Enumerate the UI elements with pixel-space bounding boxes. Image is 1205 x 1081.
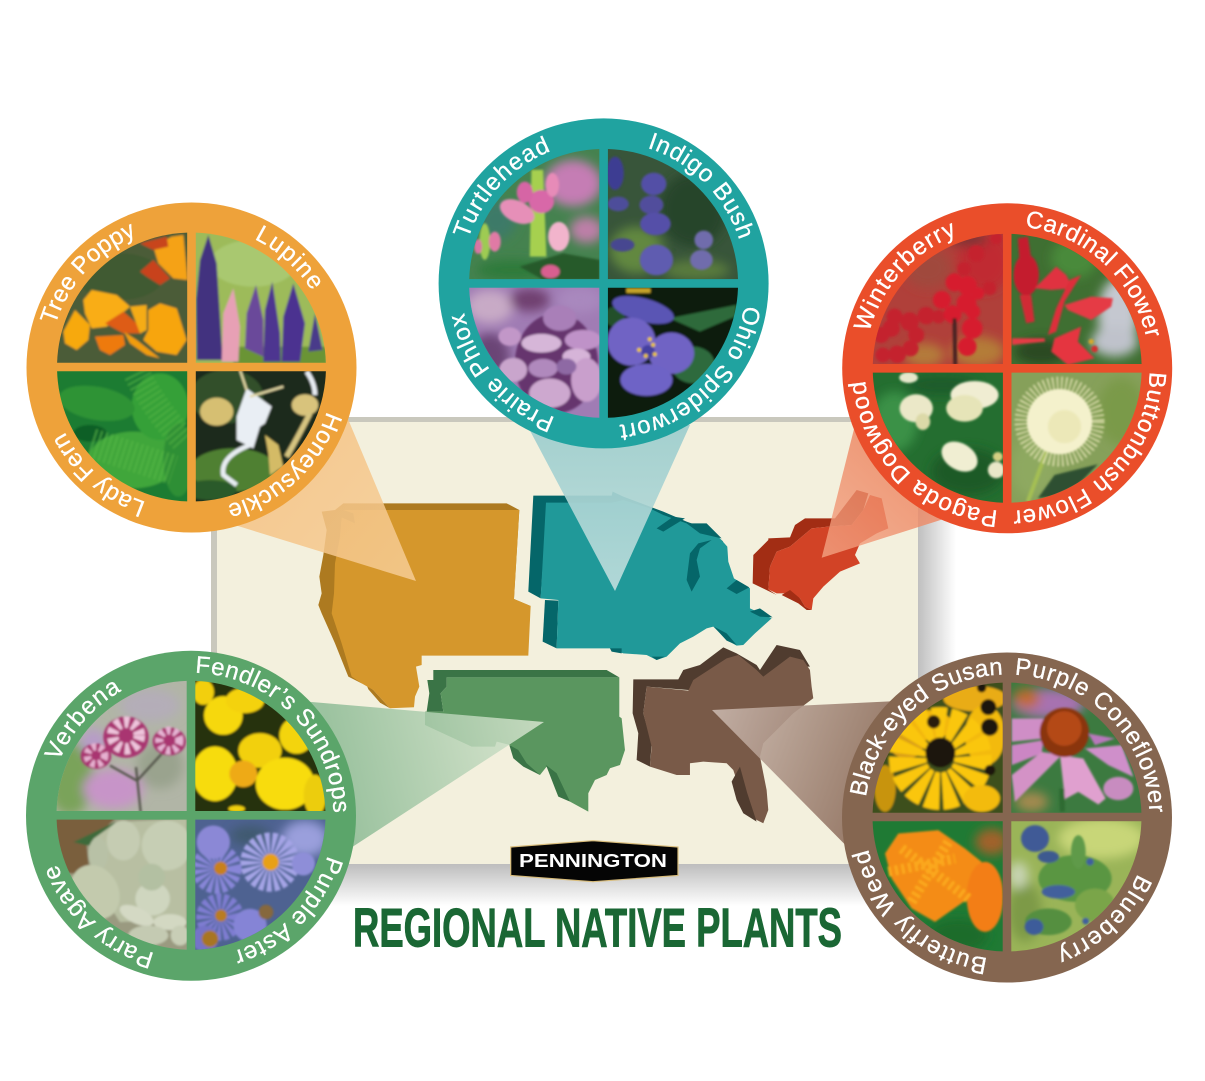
- map: Northeast region: [753, 490, 888, 610]
- title: REGIONAL NATIVE PLANTS: [353, 896, 842, 958]
- panel: Southwest plants circle: [26, 650, 356, 981]
- photo: Winterberry: [872, 234, 1003, 364]
- photo: Lady Fern: [57, 371, 188, 502]
- photo: Indigo Bush: [608, 149, 738, 280]
- label: Turtlehead: Turtlehead: [452, 136, 550, 234]
- callout pointer: Southeast: [712, 700, 917, 880]
- map: Southwest region: [425, 670, 625, 812]
- panel: Northeast plants circle: [842, 203, 1172, 534]
- photo: Parry Agave: [56, 820, 187, 950]
- photo: Fendler's Sundrops: [195, 680, 326, 811]
- callout pointer: Northeast: [822, 425, 950, 558]
- label: Ohio Spiderwort: Ohio Spiderwort: [619, 308, 760, 440]
- photo: Honeysuckle: [196, 371, 326, 502]
- logo: Pennington: [511, 841, 678, 882]
- logo: Pennington: PENNINGTON: [519, 851, 667, 871]
- photo: Black-eyed Susan: [872, 682, 1003, 813]
- panel: Midwest plants circle: [438, 118, 769, 448]
- photo: Ohio Spiderwort: [608, 288, 738, 418]
- label: Winterberry: Winterberry: [853, 222, 953, 328]
- photo: Buttonbush Flower: [1012, 372, 1142, 503]
- photo: Turtlehead: [469, 149, 600, 280]
- label: Honeysuckle: Honeysuckle: [228, 413, 342, 517]
- label: Verbena: Verbena: [44, 682, 122, 756]
- photo: Butterfly Weed: [872, 821, 1003, 952]
- panel: background map card with shadow: [211, 417, 956, 906]
- photo: Prairie Phlox: [469, 288, 600, 418]
- photo: Pagoda Dogwood: [872, 372, 1003, 503]
- label: Parry Agave: Parry Agave: [46, 866, 153, 969]
- photo: Tree Poppy: [57, 232, 188, 363]
- label: Fendler's Sundrops: Fendler’s Sundrops: [196, 656, 346, 812]
- callout pointer: Midwest: [527, 425, 690, 591]
- label: Black-eyed Susan: Black-eyed Susan: [850, 662, 1002, 796]
- callout pointer: West: [225, 400, 416, 581]
- photo: Purple Aster: [195, 820, 326, 950]
- photo: Lupine: [196, 232, 326, 363]
- photo: Cardinal Flower: [1012, 234, 1142, 364]
- photo: Blueberry: [1011, 821, 1142, 952]
- label: Buttonbush Flower: Buttonbush Flower: [1014, 373, 1166, 524]
- photo: Verbena: [56, 680, 187, 811]
- label: Purple Coneflower: Purple Coneflower: [1016, 658, 1162, 812]
- label: Blueberry: Blueberry: [1061, 875, 1152, 962]
- label: Cardinal Flower: Cardinal Flower: [1027, 212, 1159, 336]
- panel: Southeast plants circle: [842, 652, 1172, 982]
- label: Purple Aster: Purple Aster: [237, 857, 343, 964]
- map: West region: [318, 503, 531, 708]
- callout pointer: Southwest: [300, 701, 544, 855]
- label: Tree Poppy: Tree Poppy: [40, 224, 132, 320]
- label: Lady Fern: Lady Fern: [55, 433, 144, 518]
- label: Butterfly Weed: Butterfly Weed: [852, 850, 986, 974]
- label: Indigo Bush: Indigo Bush: [649, 132, 753, 239]
- map: Southeast region: [633, 645, 813, 823]
- map: Midwest region: [528, 492, 773, 660]
- panel: West plants circle: [26, 202, 356, 532]
- label: Pagoda Dogwood: Pagoda Dogwood: [848, 382, 996, 528]
- label: Lupine: Lupine: [256, 225, 320, 288]
- photo: Purple Coneflower: [1011, 682, 1142, 813]
- label: Prairie Phlox: Prairie Phlox: [452, 312, 554, 432]
